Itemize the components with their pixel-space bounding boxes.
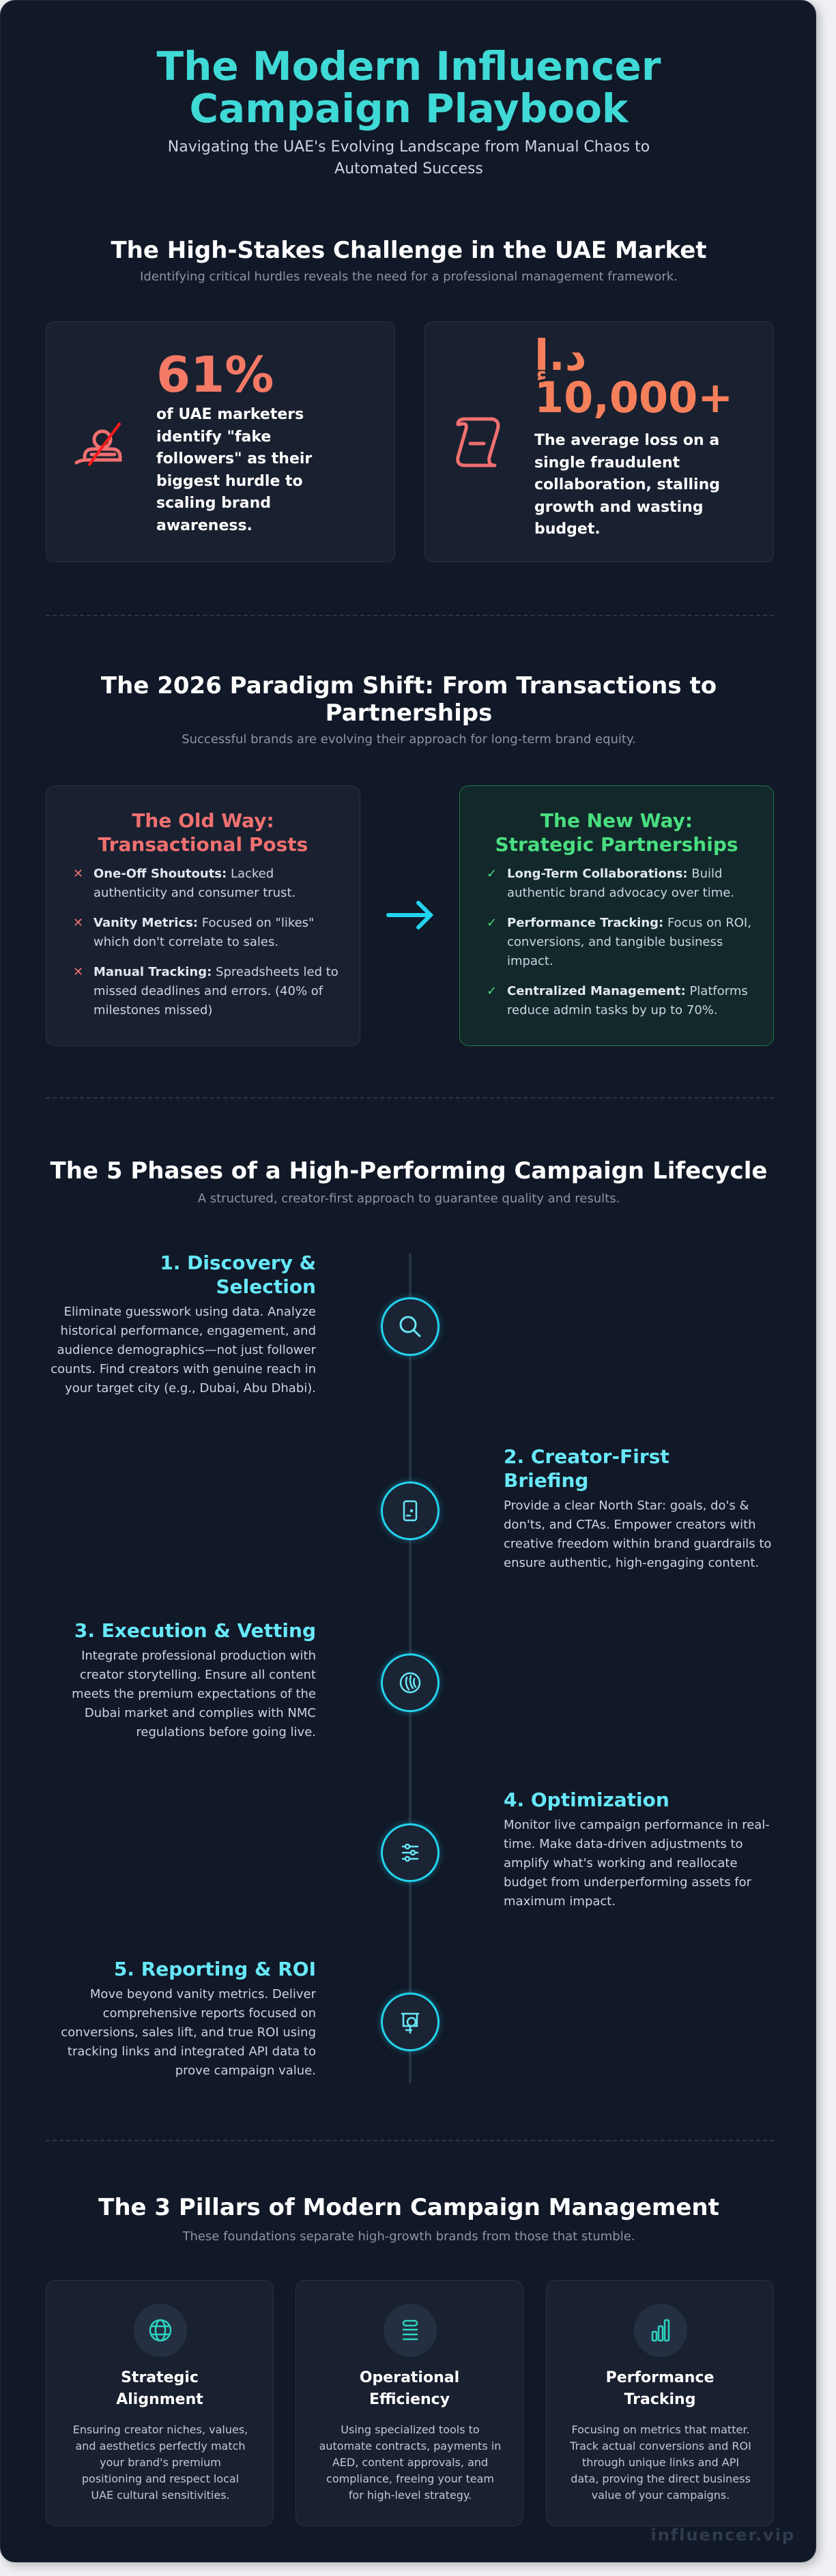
- subtitle: Automated Success: [334, 160, 483, 177]
- phase 1: 1. Discovery &: [160, 1251, 316, 1274]
- old way title: [98, 809, 308, 856]
- old way title: Transactional Posts: [98, 833, 308, 856]
- phase 2: Briefing: [504, 1469, 588, 1492]
- phase 4: 4. Optimization: [504, 1789, 669, 1811]
- heading: paradigm shift: The 2026 Paradigm Shift: From Transactions to Partnerships: [101, 672, 717, 727]
- timeline line: [409, 1253, 412, 2083]
- panel: new way: ✓: [487, 984, 497, 998]
- subheading: paradigm: Successful brands are evolving their approach for long-term brand equity.: [182, 732, 636, 747]
- panel: new way: [459, 785, 774, 1046]
- panel: performance tracking: Tracking: [624, 2391, 695, 2408]
- phase 5: 5. Reporting & ROI: [114, 1958, 316, 1980]
- old way list: One-Off Shoutouts: Lacked authenticity and consumer trust.: [93, 867, 296, 900]
- subheading: challenge: Identifying critical hurdles reveals the need for a professional management framework.: [140, 270, 678, 284]
- panel: old way: ✕: [73, 965, 83, 979]
- subtitle: [168, 139, 650, 177]
- icon: brief device: [381, 1481, 439, 1540]
- panel: operational efficiency: Using specialized tools to automate contracts, payments in AED, content approvals, and compliance, freeing your team for high-level strategy.: [319, 2423, 501, 2502]
- panel: old way: ✕: [73, 916, 83, 930]
- new way title: Strategic Partnerships: [495, 833, 738, 856]
- heading: 3 pillars: The 3 Pillars of Modern Campaign Management: [98, 2194, 719, 2221]
- new way list: Performance Tracking: Focus on ROI, conversions, and tangible business impact.: [507, 916, 751, 968]
- old way list: Manual Tracking: Spreadsheets led to missed deadlines and errors. (40% of milestones missed): [93, 965, 338, 1017]
- phase 5: Move beyond vanity metrics. Deliver comprehensive reports focused on conversions, sales lift, and true ROI using tracking links and integrated API data to prove campaign value.: [61, 1987, 316, 2078]
- stat number AED 10,000+: د.إ: [534, 330, 587, 380]
- phase 2: Provide a clear North Star: goals, do's & don'ts, and CTAs. Empower creators with creative freedom within brand guardrails to ensure authentic, high-engaging content.: [504, 1499, 771, 1570]
- subtitle: Navigating the UAE's Evolving Landscape from Manual Chaos to: [168, 139, 650, 156]
- panel: strategic alignment: Ensuring creator niches, values, and aesthetics perfectly match your brand's premium positioning and respect local UAE cultural sensitivities.: [73, 2423, 248, 2502]
- phase 3: Integrate professional production with creator storytelling. Ensure all content meets the premium expectations of the Dubai market and complies with NMC regulations before going live.: [72, 1649, 316, 1739]
- panel: strategic alignment: [46, 2280, 274, 2526]
- panel: performance tracking: [546, 2280, 774, 2526]
- phase 3: 3. Execution & Vetting: [74, 1619, 316, 1642]
- icon: globe: [134, 2304, 187, 2357]
- icon: search: [381, 1297, 439, 1356]
- panel: strategic alignment: Alignment: [116, 2391, 203, 2408]
- stat number 61%: 61%: [156, 346, 274, 403]
- old way list: Vanity Metrics: Focused on "likes" which don't correlate to sales.: [93, 916, 314, 949]
- icon: stack: [384, 2304, 437, 2357]
- panel: old way: [46, 785, 360, 1046]
- phase 1: Selection: [216, 1275, 316, 1298]
- icon: report: [381, 1993, 439, 2051]
- icon: execution: [381, 1653, 439, 1712]
- title: The Modern Influencer: [157, 43, 661, 89]
- panel: performance tracking: Performance: [606, 2369, 714, 2386]
- heading: 5 phases: The 5 Phases of a High-Performing Campaign Lifecycle: [51, 1157, 767, 1185]
- icon: sliders: [381, 1823, 439, 1882]
- panel: strategic alignment: Strategic: [121, 2369, 199, 2386]
- watermark: influencer.vip: [650, 2526, 795, 2545]
- panel: 61% stat: [46, 321, 395, 562]
- old way list: [73, 867, 338, 1017]
- new way list: [487, 867, 751, 1017]
- new way title: [495, 809, 738, 856]
- icon: bar chart: [634, 2304, 687, 2357]
- old way title: The Old Way:: [132, 809, 274, 832]
- panel: performance tracking: Focusing on metrics that matter. Track actual conversions and ROI through unique links and API data, proving the direct business value of your campaigns.: [570, 2423, 751, 2502]
- stat number AED 10,000+: [534, 330, 733, 422]
- heading: high-stakes challenge: The High-Stakes Challenge in the UAE Market: [111, 237, 707, 264]
- arrow: [386, 901, 434, 929]
- new way title: The New Way:: [540, 809, 693, 832]
- panel: old way: ✕: [73, 867, 83, 881]
- panel: new way: ✓: [487, 867, 497, 881]
- phase 2: [504, 1445, 771, 1570]
- phase 1: Eliminate guesswork using data. Analyze historical performance, engagement, and audience demographics—not just follower counts. Find creators with genuine reach in your target city (e.g., Dubai, Abu Dhabi).: [51, 1305, 316, 1395]
- title: Campaign Playbook: [189, 85, 628, 132]
- subheading: pillars: These foundations separate high-growth brands from those that stumble.: [182, 2229, 635, 2244]
- panel: operational efficiency: [296, 2280, 523, 2526]
- subheading: phases: A structured, creator-first approach to guarantee quality and results.: [198, 1191, 620, 1206]
- phase 2: 2. Creator-First: [504, 1445, 669, 1468]
- new way list: Centralized Management: Platforms reduce admin tasks by up to 70%.: [507, 984, 748, 1017]
- stat text: of UAE marketers identify "fake followers" as their biggest hurdle to scaling brand awareness.: [156, 406, 312, 534]
- stat text: The average loss on a single fraudulent collaboration, stalling growth and wasting budget.: [534, 432, 720, 538]
- panel: operational efficiency: Operational: [360, 2369, 459, 2386]
- icon: scroll: [456, 418, 500, 467]
- icon: fake followers: [75, 422, 121, 467]
- new way list: Long-Term Collaborations: Build authentic brand advocacy over time.: [507, 867, 734, 900]
- title: [157, 43, 661, 132]
- phase 1: [51, 1251, 316, 1395]
- panel: new way: ✓: [487, 916, 497, 930]
- panel: operational efficiency: Efficiency: [369, 2391, 450, 2408]
- phase 4: Monitor live campaign performance in real-time. Make data-driven adjustments to amplify what's working and reallocate budget from underperforming assets for maximum impact.: [504, 1818, 770, 1909]
- stat number AED 10,000+: 10,000+: [534, 373, 733, 422]
- panel: 10,000 loss stat: [424, 321, 774, 562]
